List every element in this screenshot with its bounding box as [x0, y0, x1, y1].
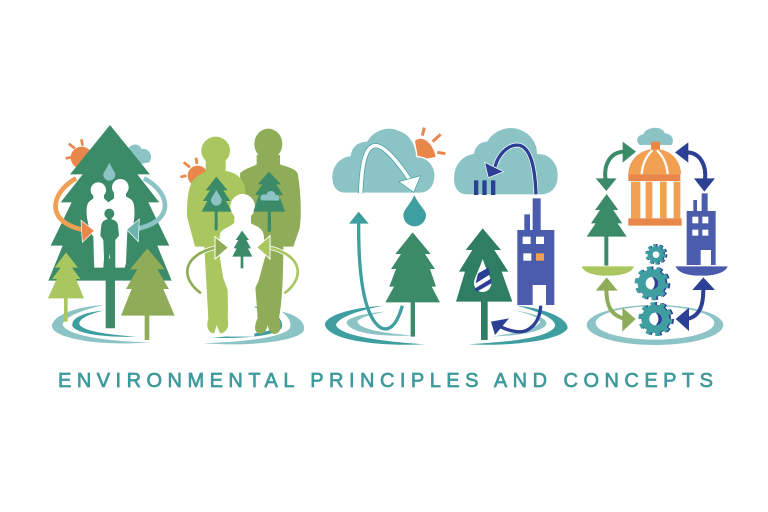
panel: adults, child and trees	[180, 129, 304, 344]
emission bars	[474, 180, 495, 195]
left green bowl	[582, 266, 634, 276]
icon: sun	[415, 128, 445, 160]
arrow: orange	[56, 178, 94, 242]
man silhouette	[240, 129, 301, 334]
panel: water cycle	[325, 128, 445, 345]
small light tree	[48, 252, 84, 322]
ripple rings	[203, 306, 304, 344]
arrow: navy bottom	[676, 277, 715, 331]
icon: small gear	[647, 245, 666, 263]
white arrow	[361, 146, 421, 193]
child silhouette	[100, 209, 119, 267]
panel: people and trees	[48, 125, 175, 343]
tree in woman	[202, 177, 232, 230]
icon: water drop	[103, 163, 115, 181]
icon: sun	[66, 139, 93, 169]
cloud	[332, 128, 435, 193]
ripple rings	[468, 306, 568, 345]
upward arrow	[349, 212, 402, 329]
arrow: navy	[485, 145, 536, 194]
tree in child	[232, 231, 252, 268]
tree	[587, 194, 627, 266]
arrow: navy top	[675, 142, 715, 192]
factory	[687, 193, 716, 265]
ripple ellipse	[587, 305, 723, 345]
arrow: green bottom	[596, 277, 636, 332]
panel: pollution cycle	[453, 127, 568, 345]
large tree	[48, 125, 172, 328]
icon: bottom gear	[641, 304, 672, 334]
water drop	[403, 195, 426, 226]
factory	[517, 198, 554, 305]
title: ENVIRONMENTAL PRINCIPLES AND CONCEPTS	[58, 370, 713, 392]
ripple rings	[325, 306, 425, 345]
icon: cloud	[127, 144, 151, 165]
ripple rings	[52, 305, 150, 343]
cloud	[453, 127, 558, 195]
white family silhouettes	[87, 179, 135, 268]
arrow: green top	[596, 142, 636, 191]
right mid-green tree	[121, 248, 175, 340]
icon: middle gear	[637, 269, 668, 298]
woman silhouette	[187, 137, 247, 333]
arrow: right green	[257, 236, 298, 293]
government dome	[628, 142, 682, 226]
icon: sun	[180, 158, 208, 186]
tree	[456, 228, 512, 340]
cloud	[637, 128, 673, 145]
arrow: light teal	[127, 178, 165, 242]
tree in man	[253, 172, 285, 232]
tree	[385, 232, 440, 337]
child silhouette	[218, 194, 266, 337]
right blue bowl	[676, 266, 728, 276]
arrow: return	[491, 306, 541, 335]
arrow: left green	[187, 237, 228, 293]
panel: institutions cycle	[582, 128, 728, 345]
